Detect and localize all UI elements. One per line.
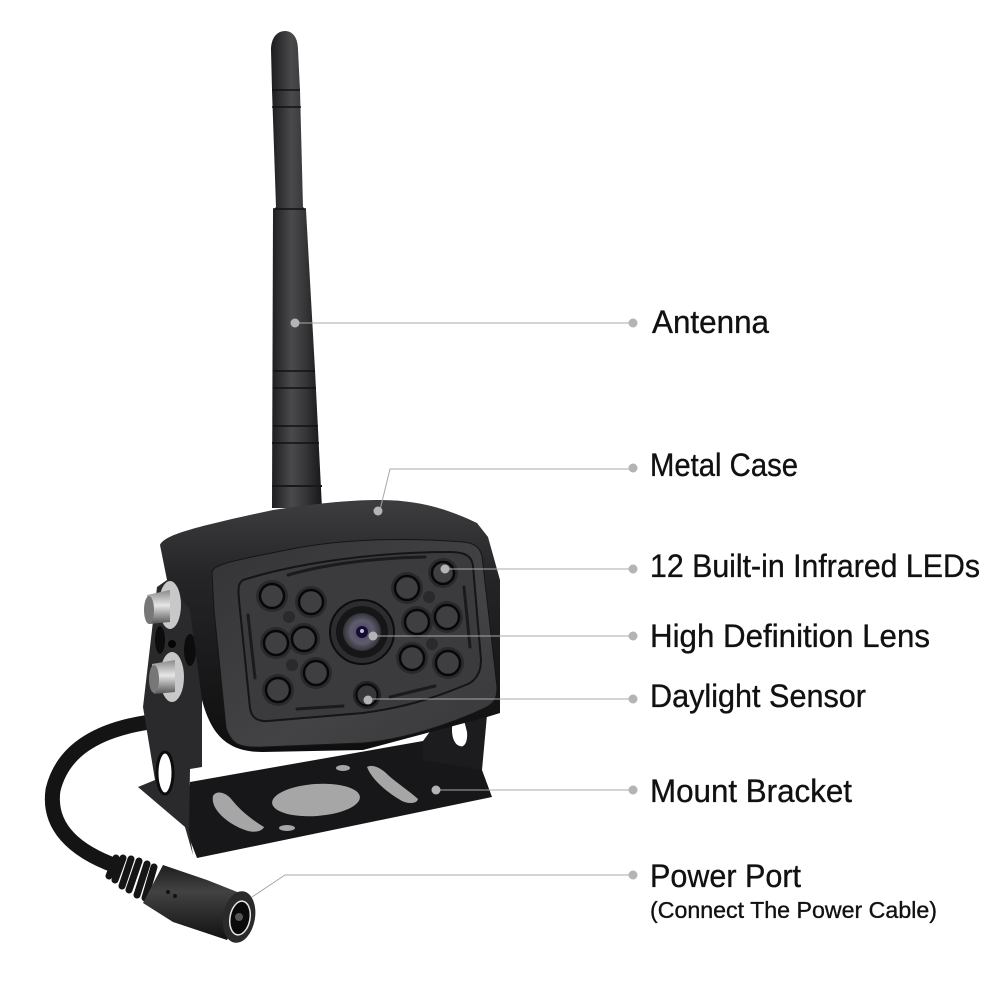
callout: antenna bbox=[290, 304, 769, 340]
camera illustration bbox=[52, 31, 500, 945]
callout: mount bracket bbox=[432, 773, 852, 809]
cable bbox=[52, 722, 150, 866]
callout: lens bbox=[368, 618, 930, 654]
callout: daylight sensor: Daylight Sensor bbox=[650, 678, 866, 714]
mount bracket base bbox=[185, 712, 492, 858]
side mount plate bbox=[138, 580, 202, 855]
antenna bbox=[271, 31, 322, 508]
small recessed dots bbox=[283, 591, 438, 671]
callout: metal case: Metal Case bbox=[650, 447, 798, 483]
power connector bbox=[143, 865, 259, 945]
callout: infrared LEDs: 12 Built-in Infrared LEDs bbox=[650, 548, 980, 584]
callout: antenna: Antenna bbox=[652, 304, 769, 340]
front panel bbox=[212, 540, 497, 747]
callout: infrared LEDs bbox=[440, 548, 980, 584]
daylight sensor bbox=[353, 681, 381, 709]
callout: metal case bbox=[374, 447, 798, 516]
callout: lens: High Definition Lens bbox=[650, 618, 930, 654]
plate grooves bbox=[248, 557, 470, 709]
raised LED plate bbox=[238, 552, 481, 721]
lens bbox=[330, 600, 394, 664]
callout: power port bbox=[252, 858, 937, 923]
callout: power port: (Connect The Power Cable) bbox=[650, 897, 937, 923]
mounting screws bbox=[144, 581, 184, 702]
callout: daylight sensor bbox=[364, 678, 866, 714]
callout: mount bracket: Mount Bracket bbox=[650, 773, 852, 809]
metal case shell bbox=[160, 500, 500, 752]
callout: power port: Power Port bbox=[650, 858, 801, 894]
12 infrared LEDs bbox=[256, 558, 464, 706]
strain relief bbox=[109, 858, 154, 898]
